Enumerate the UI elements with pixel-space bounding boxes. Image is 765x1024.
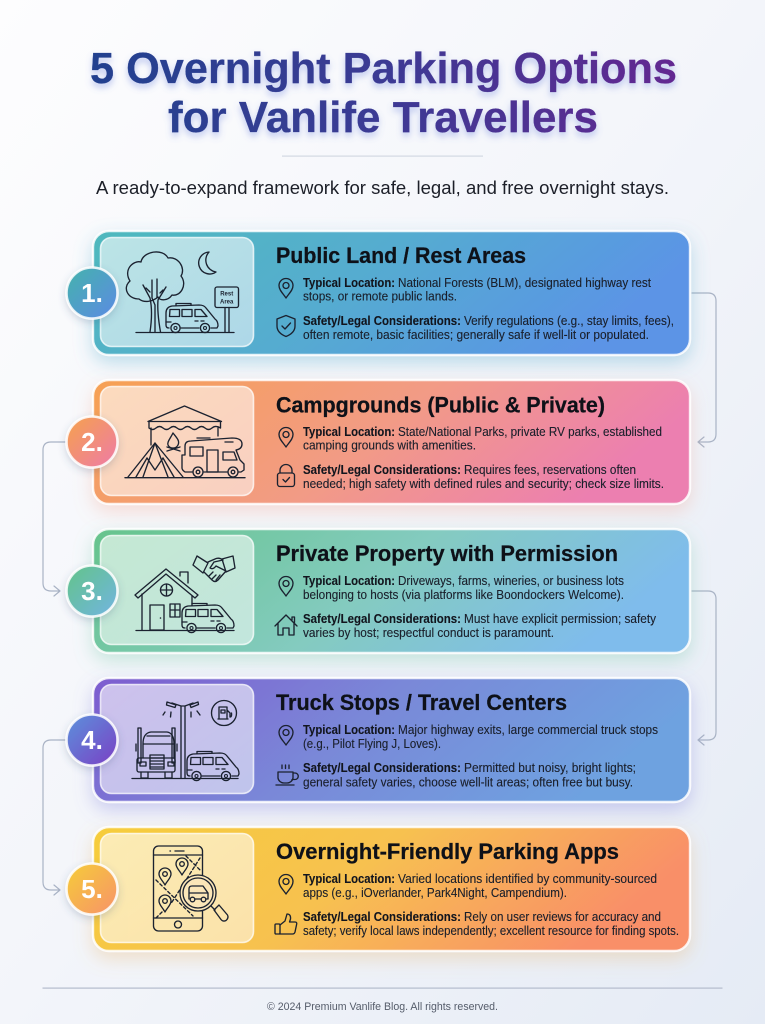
subtitle: A ready-to-expand framework for safe, legal, and free overnight stays. bbox=[96, 177, 669, 198]
title: 5 Overnight Parking Options bbox=[90, 44, 677, 93]
icon: padlock bbox=[278, 464, 294, 486]
text: typical location: Typical Location: bbox=[303, 872, 395, 886]
text: typical location bbox=[303, 574, 624, 602]
icon: location pin bbox=[279, 428, 293, 447]
panel: private property bbox=[66, 529, 690, 653]
panel: public land / rest areas bbox=[66, 231, 690, 355]
title bbox=[90, 44, 677, 142]
text: safety and legal: Safety/Legal Considerations: bbox=[303, 314, 461, 328]
icon: house, van and handshake bbox=[135, 556, 235, 633]
panel: parking apps bbox=[66, 827, 690, 951]
footer: © 2024 Premium Vanlife Blog. All rights reserved. bbox=[267, 1001, 498, 1013]
arrow: card 3 to card 4 bbox=[692, 591, 716, 745]
text: typical location: State/National Parks, private RV parks, established bbox=[398, 425, 662, 439]
text: typical location: apps (e.g., iOverlander, Park4Night, Campendium). bbox=[303, 886, 567, 900]
text: typical location: Driveways, farms, wineries, or business lots bbox=[398, 574, 624, 588]
text: safety and legal: Permitted but noisy, bright lights; bbox=[464, 761, 636, 775]
text: typical location: Varied locations identified by community-sourced bbox=[398, 872, 657, 886]
badge: 4 bbox=[66, 714, 118, 766]
icon: location pin bbox=[279, 278, 293, 298]
text: safety and legal: Safety/Legal Considerations: bbox=[303, 761, 461, 775]
text: typical location: (e.g., Pilot Flying J, Loves). bbox=[303, 737, 441, 751]
heading: Overnight-Friendly Parking Apps bbox=[276, 839, 619, 864]
badge: 2 bbox=[66, 416, 118, 468]
text: safety and legal bbox=[303, 910, 679, 938]
heading: Private Property with Permission bbox=[276, 541, 618, 566]
badge: 3: 3. bbox=[81, 576, 103, 606]
icon: thumbs up bbox=[275, 914, 297, 934]
icon: shield bbox=[277, 316, 295, 336]
text: typical location: Typical Location: bbox=[303, 723, 395, 737]
text: safety and legal: Verify regulations (e.g., stay limits, fees), bbox=[464, 314, 674, 328]
arrow: card 4 to card 5 bbox=[43, 740, 65, 895]
text: typical location bbox=[303, 872, 657, 900]
icon: location pin bbox=[279, 874, 293, 894]
text: safety and legal: needed; high safety with defined rules and security; check size limits. bbox=[303, 477, 664, 491]
text: typical location: stops, or remote public lands. bbox=[303, 290, 457, 304]
badge: 5: 5. bbox=[81, 874, 103, 904]
badge: 3 bbox=[66, 566, 118, 616]
text: typical location bbox=[303, 276, 651, 304]
text: safety and legal bbox=[303, 463, 664, 491]
heading: Campgrounds (Public & Private) bbox=[276, 393, 605, 418]
icon: canopy, tent, campfire and RV bbox=[125, 406, 245, 478]
text: safety and legal bbox=[303, 612, 657, 640]
text: safety and legal: Rely on user reviews for accuracy and bbox=[464, 910, 661, 924]
text: safety and legal: Safety/Legal Considerations: bbox=[303, 910, 461, 924]
text: safety and legal: general safety varies, choose well-lit areas; often free but busy. bbox=[303, 776, 633, 790]
text: typical location: Typical Location: bbox=[303, 276, 395, 290]
heading: Public Land / Rest Areas bbox=[276, 243, 526, 268]
text: safety and legal: Safety/Legal Considerations: bbox=[303, 612, 461, 626]
text: typical location: National Forests (BLM), designated highway rest bbox=[398, 276, 651, 290]
icon: truck, street lamp, van and fuel sign bbox=[132, 700, 239, 781]
text: safety and legal: safety; verify local laws independently; excellent resource for finding spots. bbox=[303, 924, 679, 938]
text: safety and legal: Safety/Legal Considerations: bbox=[303, 463, 461, 477]
title: for Vanlife Travellers bbox=[168, 93, 598, 142]
text: safety and legal bbox=[303, 761, 636, 790]
text: safety and legal bbox=[303, 314, 674, 342]
panel: campgrounds bbox=[66, 380, 690, 504]
icon: tree, moon, van and rest area sign: Rest bbox=[220, 292, 233, 298]
text: typical location: belonging to hosts (via platforms like Boondockers Welcome). bbox=[303, 588, 624, 602]
icon: phone map with magnifier and van bbox=[154, 846, 228, 931]
panel: truck stops bbox=[66, 678, 690, 802]
icon: tree, moon, van and rest area sign: Area bbox=[220, 300, 234, 306]
icon: house outline bbox=[275, 615, 297, 635]
badge: 5 bbox=[66, 864, 118, 914]
badge: 1 bbox=[66, 268, 118, 318]
text: typical location: Typical Location: bbox=[303, 574, 395, 588]
text: safety and legal: varies by host; respectful conduct is paramount. bbox=[303, 626, 554, 640]
heading: Truck Stops / Travel Centers bbox=[276, 690, 567, 715]
text: typical location bbox=[303, 723, 658, 751]
badge: 1: 1. bbox=[81, 278, 103, 308]
text: safety and legal: Requires fees, reservations often bbox=[464, 463, 636, 477]
icon: location pin bbox=[279, 726, 293, 745]
text: typical location: camping grounds with amenities. bbox=[303, 439, 476, 453]
text: safety and legal: often remote, basic facilities; generally safe if well-lit or populated. bbox=[303, 328, 649, 342]
badge: 2: 2. bbox=[81, 427, 103, 457]
text: safety and legal: Must have explicit permission; safety bbox=[464, 612, 657, 626]
icon: coffee cup bbox=[276, 765, 298, 785]
text: typical location: Typical Location: bbox=[303, 425, 395, 439]
icon: location pin bbox=[279, 576, 293, 596]
text: typical location: Major highway exits, large commercial truck stops bbox=[398, 723, 658, 737]
text: typical location bbox=[303, 425, 662, 453]
icon: tree, moon, van and rest area sign bbox=[126, 252, 238, 333]
arrow: card 1 to card 2 bbox=[692, 293, 716, 447]
arrow: card 2 to card 3 bbox=[43, 442, 65, 596]
badge: 4: 4. bbox=[81, 725, 103, 755]
